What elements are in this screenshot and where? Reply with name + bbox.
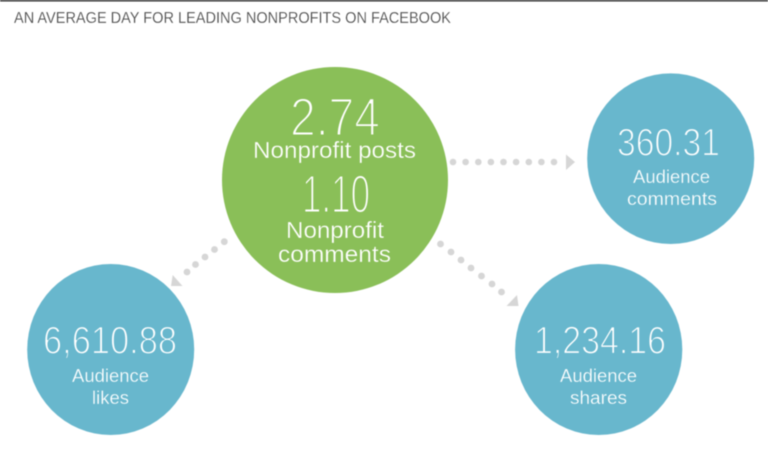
arrow: to audience likes (171, 238, 228, 286)
panel: audience likes (27, 264, 194, 435)
comments label: comments (278, 241, 391, 267)
audience shares label: Audience (560, 365, 637, 386)
audience comments label: comments (627, 188, 717, 209)
audience likes label: likes (92, 387, 129, 408)
panel: audience shares (515, 264, 682, 435)
comments label (278, 217, 391, 267)
audience shares value: 1,234.16 (534, 320, 666, 362)
title: AN AVERAGE DAY FOR LEADING NONPROFITS ON FACEBOOK (14, 10, 452, 27)
audience comments value: 360.31 (617, 122, 720, 164)
posts value: 2.74 (290, 88, 380, 148)
panel: audience comments (587, 73, 754, 244)
posts label: Nonprofit posts (253, 137, 416, 163)
panel: nonprofit activity (222, 67, 448, 293)
comments value: 1.10 (302, 164, 370, 224)
audience likes label: Audience (72, 365, 149, 386)
audience comments label: Audience (633, 166, 710, 187)
audience comments label (627, 166, 717, 209)
audience shares label (560, 365, 637, 408)
audience likes value: 6,610.88 (43, 320, 177, 362)
audience likes label (72, 365, 149, 408)
audience shares label: shares (570, 387, 627, 408)
comments label: Nonprofit (286, 217, 385, 243)
arrow: to audience shares (437, 241, 518, 306)
arrow: to audience comments (450, 154, 575, 170)
